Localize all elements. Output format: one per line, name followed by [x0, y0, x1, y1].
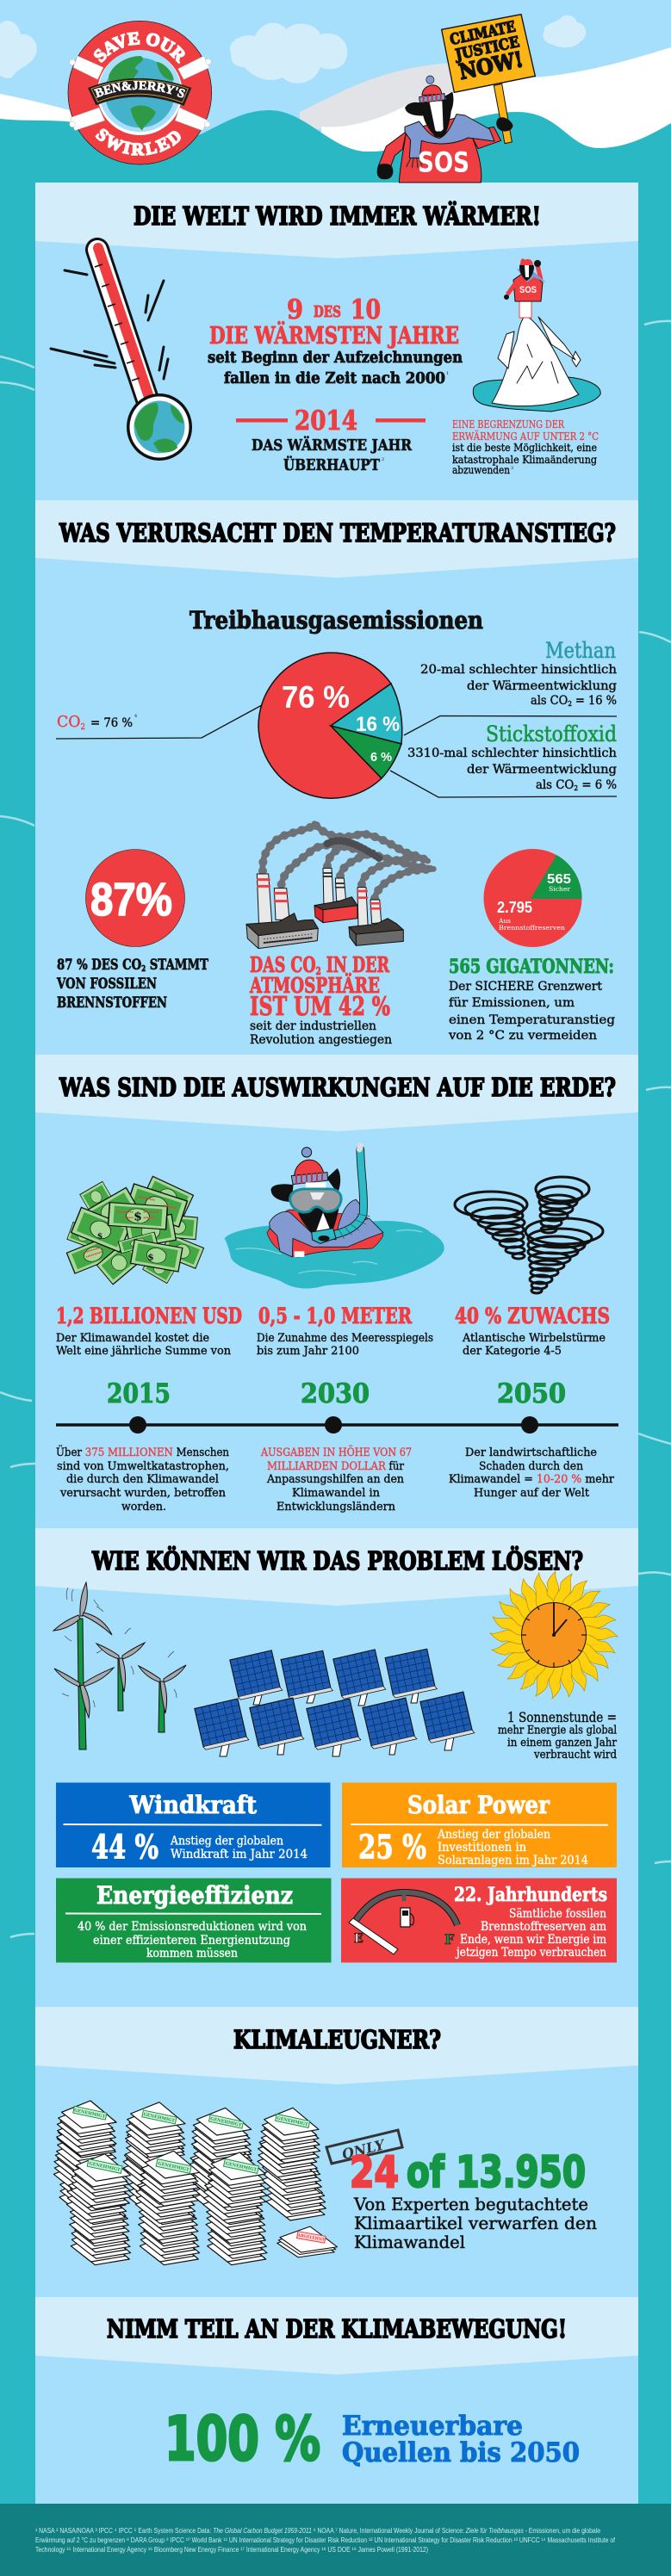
stat: sea level: bis zum Jahr 2100: [257, 1345, 359, 1358]
heading: join: NIMM TEIL AN DER KLIMABEWEGUNG!: [107, 2314, 567, 2344]
stat: cost: [56, 1303, 242, 1358]
cow head: [406, 76, 453, 137]
panel: energy efficiency: [56, 1879, 331, 1963]
text: 2030: Entwicklungsländern: [276, 1501, 396, 1514]
small rejected stack: [277, 2226, 337, 2257]
text: sun hour: 1 Sonnenstunde =: [507, 1709, 617, 1725]
callout: 100 percent renewable: Erneuerbare: [342, 2411, 523, 2442]
icon: fuel gauge: [349, 1892, 457, 1954]
logo: Save Our Swirled: [67, 21, 212, 165]
text: 2015: Über 375 MILLIONEN Menschen: [56, 1445, 230, 1459]
text: 2 degree limit: abzuwenden: [452, 464, 510, 476]
tornado left: [455, 1192, 527, 1259]
section band: effects: [35, 1055, 638, 1131]
panel: wind power: 44 %: [91, 1827, 158, 1867]
label: nitrous oxide: [407, 721, 617, 792]
stat: 2014: 2: [382, 457, 384, 462]
panel: fossil fuels end: jetzigen Tempo verbrauchen: [455, 1946, 606, 1960]
front row stacks: [66, 2151, 267, 2265]
label: nitrous oxide: 3310-mal schlechter hinsichtlich: [407, 746, 617, 760]
icon: pile of money: [66, 1176, 204, 1285]
section band: causes: [35, 500, 638, 578]
panel: fossil fuels end: Ende, wenn wir Energie im: [460, 1933, 606, 1947]
slice: methane: [331, 684, 402, 744]
stat: 9 of 10 warmest years: 9: [287, 294, 303, 325]
stat: 9 of 10 warmest years: 10: [351, 294, 381, 325]
panel: solar power: 25 %: [358, 1827, 426, 1867]
iceberg with cow: SOS: [519, 285, 537, 295]
panel: energy efficiency: 40 % der Emissionsreduktionen wird von: [78, 1920, 307, 1934]
panel: solar power: Solaranlagen im Jahr 2014: [438, 1854, 588, 1867]
stat: 565 gigatons: einen Temperaturanstieg: [449, 1013, 615, 1027]
pie chart: emissions: 76 %: [282, 679, 350, 715]
back row stacks: GENEHMIGT: [276, 2116, 308, 2127]
text: sun hour: [498, 1709, 618, 1762]
ring text: [93, 31, 185, 156]
water: [225, 1221, 444, 1288]
panel: fossil fuels end: Brennstoffreserven am: [481, 1920, 606, 1934]
factories with smoke: [246, 824, 433, 949]
stat: 565 gigatons: Der SICHERE Grenzwert: [449, 980, 602, 994]
timeline: 2030: [301, 1378, 370, 1409]
timeline: 2015: [107, 1378, 171, 1409]
stat: CO2 up 42 percent: 2: [316, 965, 321, 977]
panel: solar power: [342, 1782, 617, 1867]
stat: CO2 up 42 percent: seit der industriellen: [250, 1019, 376, 1033]
stat: 24 of 13.950: [326, 2130, 597, 2252]
stat: CO2 up 42 percent: DAS CO: [250, 952, 340, 977]
icon: solar panels: [195, 1649, 475, 1756]
label: methane: = 16 %: [572, 694, 617, 708]
pie chart: carbon budget: Aus: [498, 917, 511, 925]
stat: 87 percent: VON FOSSILEN: [56, 975, 157, 993]
back row stacks: GENEHMIGT: [143, 2112, 176, 2124]
stat: sea level: [257, 1303, 433, 1358]
section band: join: [35, 2297, 638, 2375]
stat: 565 gigatons: für Emissionen, um: [449, 996, 575, 1010]
icon: cow snorkeling in rising water: [225, 1145, 444, 1288]
white straps: [70, 56, 211, 131]
stat: CO2 up 42 percent: [249, 952, 392, 1047]
panel: wind power: Windkraft im Jahr 2014: [171, 1848, 308, 1861]
pie chart: carbon budget: [484, 849, 582, 947]
stat: 24 of 13.950: 24: [350, 2147, 399, 2197]
stat: 2014: ÜBERHAUPT: [283, 456, 380, 474]
sign: [442, 15, 535, 92]
label: CO2: CO: [57, 713, 82, 731]
text: 2050: Schaden durch den: [479, 1460, 584, 1473]
sign: JUSTICE: [452, 34, 521, 65]
stat: 24 of 13.950: Klimawandel: [354, 2232, 465, 2252]
cow body: [377, 116, 513, 183]
goggles: [290, 1189, 341, 1212]
stat: hurricanes: der Kategorie 4-5: [463, 1345, 562, 1358]
icon: pile of money: $: [147, 1251, 154, 1262]
sign pole: [494, 84, 512, 144]
text: 2 degree limit: ERWÄRMUNG AUF UNTER 2 °C: [452, 429, 599, 443]
ring text: SAVE OUR: [93, 31, 185, 64]
SOS lettering: SOS: [418, 146, 469, 178]
panel: wind power: Windkraft: [129, 1791, 257, 1819]
tornado bottom right: [525, 1218, 603, 1293]
icon: fuel gauge: F: [444, 1931, 455, 1947]
back row stacks: GENEHMIGT: [210, 2116, 242, 2128]
text: 2015: verursacht wurden, betroffen: [59, 1487, 227, 1500]
text: 2 degree limit: ist die beste Möglichkeit, eine: [452, 442, 597, 454]
pie chart: carbon budget: 565: [547, 872, 571, 887]
stat: hurricanes: 40 % ZUWACHS: [455, 1303, 610, 1328]
label: CO2: = 76 %: [90, 716, 133, 730]
callout: 100 percent renewable: 100 %: [165, 2404, 320, 2474]
section band: warming: [35, 183, 638, 258]
dark factory: [349, 888, 403, 945]
icon: wind turbines: [53, 1582, 186, 1749]
panel: fossil fuels end: [341, 1879, 617, 1963]
front row stacks: GENEHMIGT: [225, 2161, 258, 2173]
stat: 9 of 10 warmest years: seit Beginn der Aufzeichnungen: [208, 350, 463, 367]
small rejected stack: ABGELEHNT: [296, 2233, 326, 2243]
label: methane: 2: [568, 700, 572, 708]
stat: CO2 up 42 percent: IN DER: [321, 952, 390, 977]
stat: 565 gigatons: 565 GIGATONNEN:: [449, 956, 614, 978]
section band: solutions: [35, 1528, 638, 1606]
stat: sea level: 0,5 - 1,0 METER: [258, 1303, 412, 1328]
text: 2015: worden.: [121, 1501, 166, 1514]
text: 2 degree limit: katastrophale Klimaänderung: [452, 454, 597, 466]
stat: 565 gigatons: [448, 956, 615, 1043]
stat: CO2 up 42 percent: ATMOSPHÄRE: [249, 973, 380, 998]
stat: 24 of 13.950: Klimaartikel verwarfen den: [354, 2213, 597, 2233]
panel: fossil fuels end: 22. Jahrhunderts: [454, 1884, 607, 1906]
heading: greenhouse gases: Treibhausgasemissionen: [189, 606, 483, 635]
panel: solar power: Investitionen in: [438, 1841, 526, 1855]
banner: Ben & Jerry's: BEN&JERRY'S: [93, 81, 186, 98]
stat: sea level: Die Zunahme des Meeresspiegels: [257, 1332, 433, 1345]
stat: 9 of 10 warmest years: 1: [446, 371, 449, 376]
panel: solar power: Anstieg der globalen: [437, 1828, 550, 1842]
text: 2030: Anpassungshilfen an den: [266, 1473, 405, 1486]
stat: 87 percent: 87%: [90, 874, 172, 926]
stat: 24 of 13.950: Von Experten begutachtete: [353, 2194, 588, 2214]
footer: sources: ¹ NASA ² NASA/NOAA ³ IPCC ⁴ IPCC ⁵ Earth System Science Data: The Global Carbon Budget 1959-2011 ⁶ NOAA ⁷ Nature, International Weekly Journal of Science: Ziele für Treibhausgas - Emissionen, um die globale: [35, 2527, 600, 2535]
callout: 100 percent renewable: Quellen bis 2050: [342, 2437, 580, 2468]
icon: fuel gauge: E: [354, 1932, 363, 1946]
section band: deniers: [35, 2007, 638, 2084]
text: 2030: AUSGABEN IN HÖHE VON 67: [260, 1445, 412, 1459]
sign: CLIMATE: [449, 18, 517, 49]
label: CO2: [57, 713, 137, 732]
text: 2050: [449, 1446, 615, 1500]
heading: deniers: KLIMALEUGNER?: [233, 2025, 441, 2054]
text: 2050: Klimawandel = 10-20 % mehr: [449, 1473, 615, 1486]
grey factory: [246, 874, 318, 949]
stamp: only: [326, 2130, 402, 2164]
footer: sources: Technology ¹⁵ International Energy Agency ¹⁶ Bloomberg New Energy Finance ¹⁷ International Energy Agency ¹⁸ US DOE ¹⁹ James Powell (1991-2012): [35, 2546, 428, 2554]
sign: NOW!: [457, 46, 525, 84]
cloud middle: [230, 23, 347, 84]
icon: paper stacks: [53, 2101, 337, 2265]
smoke: [263, 824, 433, 898]
label: nitrous oxide: der Wärmeentwicklung: [467, 763, 617, 777]
text: 2015: die durch den Klimawandel: [66, 1473, 219, 1486]
side swooshes: [0, 321, 671, 1937]
callout: 100 percent renewable: [165, 2404, 580, 2474]
cow mascot with sign: [377, 15, 535, 183]
panel: fossil fuels end: Sämtliche fossilen: [509, 1907, 606, 1921]
text: 2 degree limit: [452, 418, 599, 476]
stat: 565 gigatons: von 2 °C zu vermeiden: [448, 1029, 597, 1043]
stat: cost: Welt eine jährliche Summe von: [56, 1345, 232, 1358]
icon: sun clock: [490, 1571, 618, 1699]
text: sun hour: in einem ganzen Jahr: [507, 1737, 618, 1749]
pie chart: emissions: [258, 653, 402, 798]
text: sun hour: verbraucht wird: [533, 1749, 617, 1762]
label: CO2: 4: [134, 714, 137, 719]
label: nitrous oxide: als CO: [536, 778, 576, 792]
stat: cost: 1,2 BILLIONEN USD: [56, 1303, 242, 1328]
tornado top right: [536, 1177, 589, 1233]
text: 2 degree limit: 3: [511, 466, 513, 471]
snorkel: [329, 1145, 370, 1238]
text: 2015: [56, 1445, 230, 1514]
icon: pile of money: $: [97, 1231, 103, 1241]
pie chart: emissions: 16 %: [356, 713, 400, 736]
icon: tornadoes: [455, 1177, 603, 1293]
stat: cost: Der Klimawandel kostet die: [56, 1332, 209, 1345]
label: CO2: 2: [80, 723, 85, 732]
head: [271, 1148, 340, 1234]
cloud left: [0, 21, 37, 78]
stat: hurricanes: Atlantische Wirbelstürme: [462, 1332, 606, 1345]
stat: CO2 up 42 percent: Revolution angestiegen: [250, 1033, 392, 1047]
label: nitrous oxide: 2: [574, 784, 578, 792]
panel: energy efficiency: kommen müssen: [146, 1947, 238, 1960]
stat: 2014: DAS WÄRMSTE JAHR: [252, 437, 412, 455]
stat: 87 percent: [56, 849, 208, 1012]
stamp: only: ONLY: [340, 2136, 388, 2163]
stat: 2014: [236, 406, 426, 474]
label: nitrous oxide: Stickstoffoxid: [486, 721, 617, 746]
icon: pile of money: $: [134, 1211, 142, 1224]
label: methane: als CO: [531, 694, 571, 708]
red factory: [314, 868, 357, 923]
text: 2 degree limit: EINE BEGRENZUNG DER: [452, 418, 565, 430]
text: 2050: Hunger auf der Welt: [474, 1487, 590, 1500]
thermometer: [51, 248, 192, 461]
pie chart: carbon budget: Brennstoffreserven: [499, 924, 565, 932]
back row stacks: [53, 2101, 326, 2220]
scarf: [270, 1199, 383, 1257]
timeline: 2050: [497, 1378, 566, 1409]
stat: 9 of 10 warmest years: DIE WÄRMSTEN JAHRE: [209, 320, 459, 350]
stat: 9 of 10 warmest years: [208, 294, 463, 387]
stat: hurricanes: [455, 1303, 610, 1358]
timeline: [56, 1378, 618, 1434]
text: sun hour: mehr Energie als global: [498, 1724, 617, 1737]
footer: sources: [0, 2504, 671, 2576]
label: methane: Methan: [545, 638, 616, 663]
stat: 24 of 13.950: of 13.950: [407, 2147, 586, 2197]
scarf: [405, 115, 494, 158]
iceberg with cow: [473, 258, 600, 412]
pie chart: carbon budget: Sicher: [549, 885, 570, 893]
stat: 2014: 2014: [295, 406, 357, 437]
label: nitrous oxide: = 6 %: [578, 778, 617, 792]
label: methane: [420, 638, 617, 708]
text: 2030: MILLIARDEN DOLLAR für: [267, 1460, 405, 1473]
stat: 9 of 10 warmest years: fallen in die Zeit nach 2000: [224, 370, 445, 387]
stat: CO2 up 42 percent: IST UM 42 %: [250, 992, 390, 1022]
panel: energy efficiency: einer effizienteren Energienutzung: [93, 1934, 290, 1947]
text: 2015: sind von Umweltkatastrophen,: [57, 1460, 229, 1473]
heading: warming: DIE WELT WIRD IMMER WÄRMER!: [134, 200, 541, 231]
label: methane: 20-mal schlechter hinsichtlich: [420, 663, 617, 677]
front row stacks: GENEHMIGT: [89, 2161, 121, 2173]
panel: solar power: Solar Power: [407, 1791, 550, 1819]
pie chart: emissions: 6 %: [370, 750, 392, 765]
panel: energy efficiency: Energieeffizienz: [96, 1881, 293, 1910]
back row stacks: GENEHMIGT: [73, 2108, 106, 2120]
panel: wind power: [56, 1782, 331, 1867]
stat: 87 percent: STAMMT: [146, 957, 208, 974]
stat: 87 percent: 2: [141, 965, 146, 974]
text: 2030: [260, 1445, 412, 1514]
slice: nitrous oxide: [331, 726, 401, 778]
stat: 87 percent: 87 % DES CO: [57, 957, 165, 974]
label: methane: der Wärmeentwicklung: [467, 679, 617, 693]
stat: 9 of 10 warmest years: DES: [314, 303, 341, 321]
ring text: SWIRLED: [95, 128, 181, 156]
text: 2050: Der landwirtschaftliche: [465, 1446, 597, 1459]
cloud right: [543, 15, 586, 47]
globe: [105, 56, 175, 131]
header landscape: [0, 0, 671, 258]
panel: wind power: Anstieg der globalen: [170, 1834, 283, 1848]
leader lines: [56, 705, 617, 797]
front row stacks: GENEHMIGT: [158, 2161, 189, 2173]
text: 2030: Klimawandel in: [292, 1487, 381, 1500]
slice: CO2: [258, 653, 391, 798]
stat: 87 percent: BRENNSTOFFEN: [57, 994, 167, 1012]
pie chart: carbon budget: 2.795: [497, 899, 532, 916]
body: [267, 1210, 383, 1257]
